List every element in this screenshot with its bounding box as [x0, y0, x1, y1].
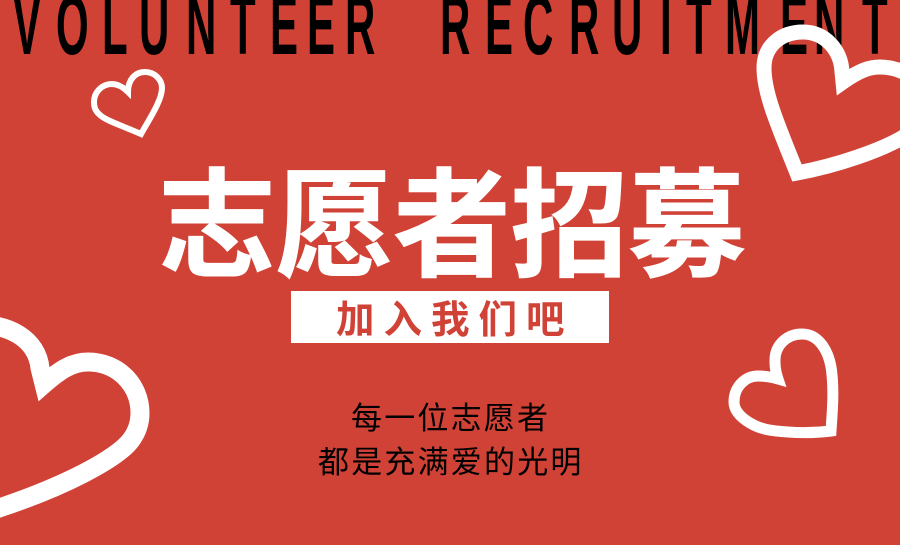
- icon: heart top left: [94, 72, 162, 134]
- line 1: 每一位志愿者: [351, 401, 550, 436]
- line 2: 都是充满爱的光明: [318, 445, 584, 480]
- icon: heart bottom left: [0, 325, 140, 511]
- icon: heart top right: [764, 32, 900, 173]
- main title: 志愿者招募: [158, 161, 746, 292]
- icon: heart bottom right: [734, 334, 833, 433]
- body text: [318, 401, 584, 480]
- banner background: [291, 291, 609, 343]
- banner text: 加入我们吧: [336, 299, 574, 342]
- subtitle banner: [291, 291, 609, 343]
